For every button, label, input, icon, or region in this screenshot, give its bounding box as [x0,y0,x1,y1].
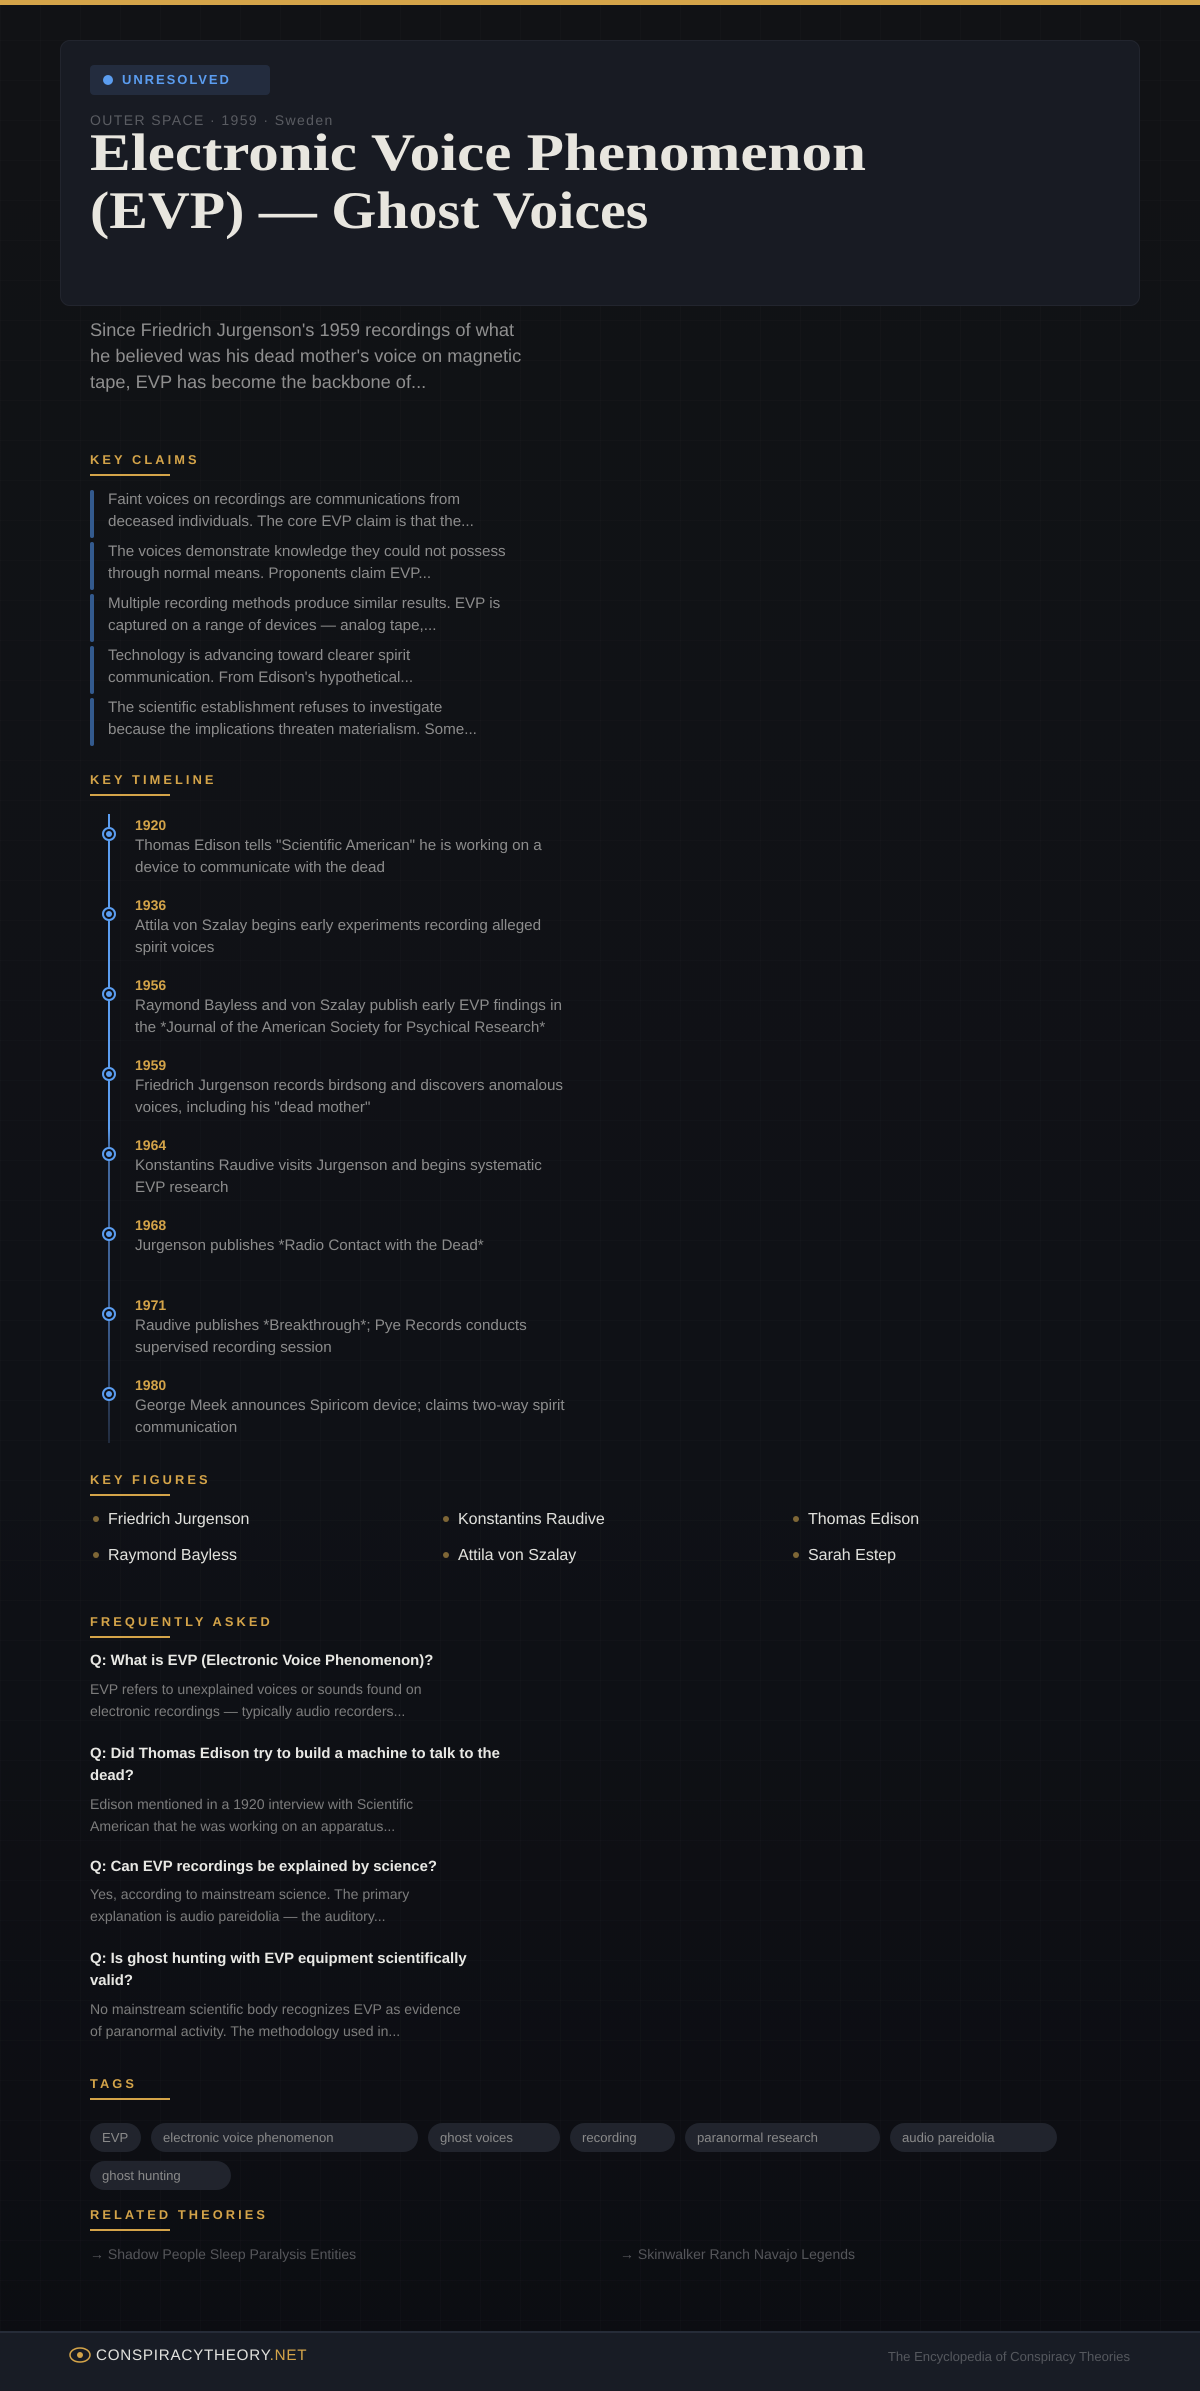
answer 3: explanation is audio pareidolia — the auditory... [90,1908,386,1924]
tag: ghost hunting [102,2168,181,2183]
event 1936 [102,897,541,956]
answer 3: Yes, according to mainstream science. The primary [90,1886,409,1902]
question 4: valid? [90,1973,133,1989]
claim 2 [90,542,506,590]
status badge [90,65,270,95]
question 2 [90,1746,500,1784]
event 1964: EVP research [135,1179,228,1196]
question 2: dead? [90,1768,134,1784]
intro paragraph [90,319,521,392]
tag [570,2123,675,2152]
event 1936: 1936 [135,897,166,913]
title: Electronic Voice Phenomenon [90,124,866,182]
answer 2: Edison mentioned in a 1920 interview with Scientific [90,1796,413,1812]
event 1920: 1920 [135,817,166,833]
brand wordmark: CONSPIRACYTHEORY.NET [96,2347,307,2364]
event 1959 [102,1057,563,1116]
event 1968: Jurgenson publishes *Radio Contact with the Dead* [135,1237,484,1254]
tag [151,2123,418,2152]
question 4 [90,1951,467,1989]
event 1959: Friedrich Jurgenson records birdsong and discovers anomalous [135,1077,563,1094]
badge label: UNRESOLVED [122,72,231,87]
claim 5 [90,698,477,746]
tags [90,2123,1057,2190]
intro paragraph: tape, EVP has become the backbone of... [90,371,426,392]
event 1964: Konstantins Raudive visits Jurgenson and begins systematic [135,1157,542,1174]
question 1: Q: What is EVP (Electronic Voice Phenomenon)? [90,1653,433,1669]
tag [90,2161,231,2190]
figure: Raymond Bayless [108,1547,237,1564]
event 1956: the *Journal of the American Society for Psychical Research* [135,1019,545,1036]
event 1980: 1980 [135,1377,166,1393]
event 1964 [102,1137,542,1196]
event 1959: 1959 [135,1057,166,1073]
answer 1: electronic recordings — typically audio recorders... [90,1703,405,1719]
answer 4: of paranormal activity. The methodology used in... [90,2023,400,2039]
answer 4: No mainstream scientific body recognizes EVP as evidence [90,2001,461,2017]
event 1936: spirit voices [135,939,214,956]
tag: electronic voice phenomenon [163,2130,334,2145]
event 1920: device to communicate with the dead [135,859,385,876]
event 1980: George Meek announces Spiricom device; claims two-way spirit [135,1397,565,1414]
claim 2: through normal means. Proponents claim EVP... [108,565,431,582]
claim 1: Faint voices on recordings are communications from [108,491,460,508]
claim 1: deceased individuals. The core EVP claim is that the... [108,513,474,530]
event 1980: communication [135,1419,237,1436]
event 1956 [102,977,562,1036]
claim 4: communication. From Edison's hypothetical... [108,669,413,686]
heading: related theories: RELATED THEORIES [90,2207,268,2222]
event 1971: supervised recording session [135,1339,332,1356]
heading: frequently asked: FREQUENTLY ASKED [90,1614,273,1629]
question 3: Q: Can EVP recordings be explained by science? [90,1859,437,1875]
icon: eye logo [69,2347,91,2363]
answer 4 [90,2001,461,2039]
event 1956: 1956 [135,977,166,993]
claim 4 [90,646,413,694]
tag [90,2123,141,2152]
event 1956: Raymond Bayless and von Szalay publish early EVP findings in [135,997,562,1014]
tag: recording [582,2130,637,2145]
claim 5: because the implications threaten materialism. Some... [108,721,477,738]
tag [685,2123,880,2152]
figure: Friedrich Jurgenson [108,1511,249,1528]
claim 5: The scientific establishment refuses to investigate [108,699,442,716]
question 2: Q: Did Thomas Edison try to build a machine to talk to the [90,1746,500,1762]
event 1920 [102,817,542,876]
figure: Konstantins Raudive [458,1511,605,1528]
tag: paranormal research [697,2130,818,2145]
event 1971: Raudive publishes *Breakthrough*; Pye Records conducts [135,1317,527,1334]
question 4: Q: Is ghost hunting with EVP equipment scientifically [90,1951,467,1967]
badge dot [103,75,113,85]
timeline [102,814,565,1443]
intro paragraph: Since Friedrich Jurgenson's 1959 recordings of what [90,319,514,340]
event 1936: Attila von Szalay begins early experiments recording alleged [135,917,541,934]
heading: key figures: KEY FIGURES [90,1472,211,1487]
tag [890,2123,1057,2152]
answer 2: American that he was working on an apparatus... [90,1818,395,1834]
related link: → Skinwalker Ranch Navajo Legends [620,2246,855,2262]
tag: audio pareidolia [902,2130,995,2145]
tag [428,2123,560,2152]
meta line: OUTER SPACE · 1959 · Sweden [90,112,334,128]
claim 3: Multiple recording methods produce similar results. EVP is [108,595,500,612]
event 1971: 1971 [135,1297,166,1313]
tag: EVP [102,2130,128,2145]
event 1968: 1968 [135,1217,166,1233]
figure: Thomas Edison [808,1511,919,1528]
claim 1 [90,490,474,538]
heading: key claims: KEY CLAIMS [90,452,200,467]
event 1964: 1964 [135,1137,166,1153]
key figures list [93,1511,919,1564]
figure: Attila von Szalay [458,1547,576,1564]
claim 4: Technology is advancing toward clearer spirit [108,647,410,664]
claim 3: captured on a range of devices — analog tape,... [108,617,436,634]
event 1920: Thomas Edison tells "Scientific American" he is working on a [135,837,542,854]
event 1971 [102,1297,527,1356]
intro paragraph: he believed was his dead mother's voice on magnetic [90,345,521,366]
figure: Sarah Estep [808,1547,896,1564]
answer 1 [90,1681,422,1719]
timeline axis [108,814,110,1443]
claim 2: The voices demonstrate knowledge they could not possess [108,543,506,560]
tag: ghost voices [440,2130,513,2145]
answer 1: EVP refers to unexplained voices or sounds found on [90,1681,422,1697]
panel: hero header [60,40,1140,306]
related link: → Shadow People Sleep Paralysis Entities [90,2246,356,2262]
title: (EVP) — Ghost Voices [90,182,648,240]
footer tagline: The Encyclopedia of Conspiracy Theories [888,2349,1130,2364]
event 1980 [102,1377,565,1436]
heading: tags: TAGS [90,2076,137,2091]
heading: key timeline: KEY TIMELINE [90,772,217,787]
panel: key claims [90,490,506,746]
answer 3 [90,1886,410,1924]
event 1968 [102,1217,484,1254]
answer 2 [90,1796,413,1834]
claim 3 [90,594,500,642]
footer [0,2331,1200,2391]
top accent bar [0,0,1200,5]
event 1959: voices, including his "dead mother" [135,1099,370,1116]
title [90,124,866,240]
